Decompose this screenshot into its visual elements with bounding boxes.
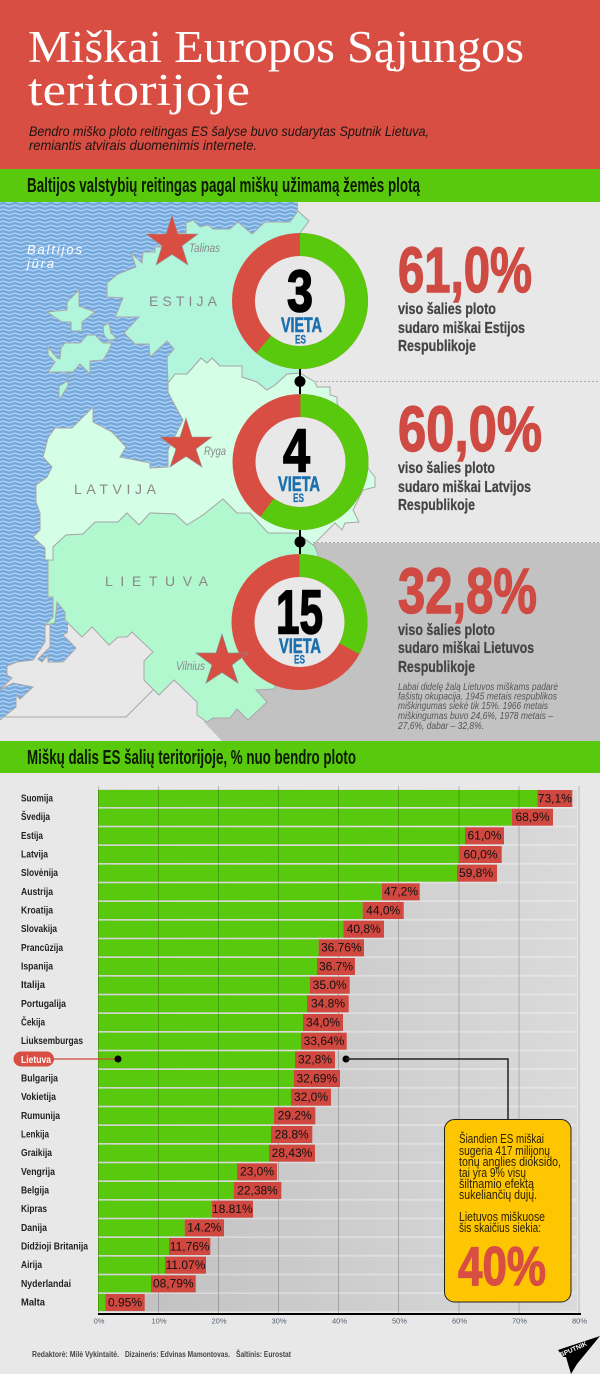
stat: Lithuania — [398, 555, 537, 676]
section heading: EU share — [0, 741, 600, 773]
sea label: Baltijos — [27, 242, 82, 257]
Estonian island: Muhu — [103, 323, 117, 340]
axis: 10% — [151, 1316, 167, 1326]
section heading: Baltic ranking: Baltijos valstybių reitingas pagal miškų užimamą žemės plotą — [27, 175, 421, 197]
country labels: Austrija — [21, 886, 53, 898]
icon: star Vilnius — [196, 634, 248, 683]
country labels: Airija — [21, 1259, 42, 1271]
chart track — [98, 789, 577, 1312]
country labels: Danija — [21, 1222, 47, 1234]
donut: Latvia rank 4: 4 — [283, 416, 310, 484]
country labels: Latvija — [21, 848, 48, 860]
connector between donuts — [294, 368, 306, 555]
value label: Belgija: 22,38% — [237, 1183, 278, 1197]
sea label: jūra — [25, 256, 54, 271]
country labels: Portugalija — [21, 998, 66, 1010]
stat: Estonia: sudaro miškai Estijos — [398, 320, 525, 337]
note on Lithuanian forests history: miškingumas siekė tik 15%. 1966 metais — [398, 700, 549, 712]
value label: Rumunija — [274, 1107, 315, 1124]
map of the Baltic states — [0, 202, 600, 741]
sea label — [25, 242, 82, 271]
value label: Malta: 0.95% — [108, 1295, 142, 1309]
axis: 30% — [271, 1316, 287, 1326]
value label: Danija: 14.2% — [187, 1221, 222, 1235]
value label: Slovakija — [343, 921, 384, 938]
neighbouring land — [0, 622, 300, 741]
value label: Ispanija: 36.7% — [319, 959, 353, 973]
subtitle: remiantis atvirais duomenimis internete. — [29, 137, 257, 153]
donut: Latvia rank 4: ES — [293, 491, 304, 505]
axis: 70% — [512, 1316, 527, 1326]
axis: 60% — [452, 1316, 467, 1326]
country labels: Vokietija — [21, 1091, 56, 1103]
axis — [94, 1314, 587, 1326]
value label: Vokietija: 32,0% — [294, 1090, 328, 1104]
country labels: Vengrija — [21, 1166, 55, 1178]
donut: Estonia rank 3: 3 — [287, 258, 313, 324]
highlight: Lietuva pill and pointer: Lietuva — [21, 1054, 51, 1066]
callout connector — [342, 1056, 508, 1120]
country labels — [21, 792, 88, 1308]
country labels: Rumunija — [21, 1110, 60, 1122]
country labels: Čekija — [21, 1016, 45, 1028]
country labels: Italija — [21, 979, 45, 991]
footer credits: Šaltinis: Eurostat — [236, 1350, 291, 1359]
value label: Italija: 35.0% — [313, 978, 347, 992]
value label: Lenkija — [271, 1126, 312, 1143]
stat: Estonia: Respublikoje — [398, 338, 476, 355]
callout: CO2 absorption: šiltnamio efektą — [459, 1177, 534, 1191]
city label: Ryga: Ryga — [204, 446, 226, 458]
value label: Rumunija: 29.2% — [278, 1109, 312, 1123]
highlight: Lietuva pill and pointer — [14, 1052, 122, 1066]
Lithuania — [45, 499, 320, 722]
country labels: Liuksemburgas — [21, 1035, 83, 1047]
callout: CO2 absorption: sugeria 417 milijonų — [459, 1144, 550, 1158]
country labels: Nyderlandai — [21, 1278, 71, 1290]
country labels: Kipras — [21, 1203, 47, 1215]
callout: CO2 absorption: tonų anglies dioksido, — [459, 1155, 561, 1169]
country labels: Slovėnija — [21, 867, 58, 879]
country labels: Estija — [21, 830, 43, 842]
donut: Lithuania rank 15: VIETA — [279, 635, 321, 658]
icon: star Tallinn — [146, 215, 198, 265]
value label: Čekija: 34,0% — [306, 1015, 340, 1029]
note on Lithuanian forests history: 27,6%, dabar – 32,8%. — [397, 720, 484, 732]
stat: Latvia: 60,0% — [398, 393, 542, 465]
axis: 50% — [392, 1316, 407, 1326]
value label: Graikija: 28,43% — [272, 1146, 313, 1160]
city label: Talinas: Talinas — [189, 243, 220, 255]
Estonian island: Saaremaa — [48, 335, 112, 400]
stat: Lithuania: 32,8% — [398, 555, 537, 627]
country labels: Suomija — [21, 792, 53, 804]
stat: Estonia: viso šalies ploto — [398, 301, 496, 318]
value label: Vengrija: 23,0% — [240, 1165, 274, 1179]
value label: Slovakija: 40,8% — [347, 922, 381, 936]
country label: Estija: ESTIJA — [149, 293, 218, 309]
callout: CO2 absorption: sukeliančių dujų. — [459, 1188, 537, 1202]
donut: Latvia rank 4 — [232, 394, 368, 530]
header panel — [0, 0, 600, 169]
callout: CO2 absorption: tai yra 9% visų — [459, 1166, 526, 1180]
donut: Lithuania rank 15: 15 — [276, 578, 323, 648]
country labels: Malta — [21, 1296, 45, 1308]
stat: Latvia — [398, 393, 542, 514]
country labels: Slovakija — [21, 923, 57, 935]
value label: Slovėnija: 59,8% — [459, 866, 493, 880]
stat: Latvia: viso šalies ploto — [398, 460, 495, 477]
subtitle: Bendro miško ploto reitingas ES šalyse buvo sudarytas Sputnik Lietuva, — [29, 123, 429, 139]
note on Lithuanian forests history: miškingumas buvo 24,6%, 1978 metais – — [398, 710, 553, 722]
bar chart: forest share by country — [14, 786, 587, 1326]
donut: Estonia rank 3: VIETA — [281, 314, 322, 337]
axis: 20% — [211, 1316, 227, 1326]
country labels: Didžioji Britanija — [21, 1240, 88, 1252]
Latvia — [33, 358, 375, 560]
donut: Estonia rank 3 — [232, 233, 368, 369]
value label: Airija: 11.07% — [166, 1258, 206, 1272]
title: Miškai Europos Sąjungos — [28, 22, 524, 72]
value label: Švedija — [512, 809, 553, 826]
value label: Estija: 61,0% — [467, 829, 502, 843]
Estonian island: Hiiumaa — [47, 290, 95, 331]
footer credits: Redaktorė: Milė Vykintaitė. — [32, 1350, 119, 1359]
Estonia — [107, 211, 309, 390]
donut: Lithuania rank 15: ES — [294, 652, 305, 666]
donut: Latvia rank 4: VIETA — [278, 473, 320, 496]
light background right — [298, 202, 600, 543]
country labels: Ispanija — [21, 960, 53, 972]
icon: star Riga — [160, 418, 212, 467]
country labels: Švedija — [21, 810, 50, 823]
value label: Lenkija: 28.8% — [275, 1127, 309, 1141]
city label: Vilnius: Vilnius — [176, 661, 205, 673]
value label: Portugalija — [307, 995, 349, 1012]
axis: 0% — [94, 1316, 105, 1326]
title — [28, 22, 524, 115]
country labels: Belgija — [21, 1184, 49, 1196]
logo: Sputnik: SPUTNIK — [559, 1341, 589, 1359]
donut: Lithuania rank 15 — [232, 554, 368, 690]
donut: Estonia rank 3: ES — [295, 332, 306, 346]
section heading: Baltic ranking — [0, 169, 600, 202]
country labels: Bulgarija — [21, 1072, 58, 1084]
logo: Sputnik — [558, 1336, 600, 1374]
value label: Lietuva: 32,8% — [298, 1053, 332, 1067]
axis: 80% — [572, 1316, 587, 1326]
dark background panel: Lithuania — [204, 543, 600, 741]
stat: Lithuania: Respublikoje — [398, 659, 475, 676]
stat: Estonia: 61,0% — [398, 234, 532, 306]
note on Lithuanian forests history: Labai didelę žalą Lietuvos miškams padarė — [398, 681, 558, 693]
value label: Liuksemburgas: 33,64% — [304, 1034, 345, 1048]
value label: Kipras: 18.81% — [212, 1202, 253, 1216]
axis: 40% — [332, 1316, 347, 1326]
callout: CO2 absorption: 40% — [458, 1235, 546, 1297]
country labels: Graikija — [21, 1147, 52, 1159]
value label: Austrija: 47,2% — [384, 885, 418, 899]
value label: Kroatija — [363, 902, 404, 919]
green bars — [98, 790, 537, 1311]
value label: Latvija: 60,0% — [463, 847, 498, 861]
value label: Latvija — [459, 846, 502, 863]
value label: Kroatija: 44,0% — [366, 903, 401, 917]
callout: CO2 absorption: Šiandien ES miškai — [459, 1131, 544, 1146]
value label: Portugalija: 34.8% — [311, 997, 345, 1011]
country labels: Kroatija — [21, 904, 53, 916]
callout: CO2 absorption: šis skaičius siekia: — [459, 1221, 541, 1235]
subtitle — [29, 123, 429, 153]
value label: Nyderlandai: 08,79% — [153, 1277, 194, 1291]
country labels: Lenkija — [21, 1128, 49, 1140]
value label: Didžioji Britanija: 11,76% — [170, 1239, 210, 1253]
stat: Estonia — [398, 234, 532, 355]
footer credits — [32, 1350, 291, 1359]
country label: Latvija: LATVIJA — [74, 481, 157, 497]
stat: Lithuania: viso šalies ploto — [398, 622, 495, 639]
value label: Švedija: 68,9% — [515, 810, 550, 824]
value label: Suomija: 73,1% — [538, 792, 572, 806]
stat: Latvia: sudaro miškai Latvijos — [398, 479, 531, 496]
section heading: EU share: Miškų dalis ES šalių teritorijoje, % nuo bendro ploto — [27, 747, 356, 769]
stat: Lithuania: sudaro miškai Lietuvos — [398, 640, 534, 657]
title: teritorijoje — [28, 65, 250, 115]
country label: Lietuva: LIETUVA — [105, 573, 209, 589]
dotted divider lines — [313, 382, 600, 542]
value label: Bulgarija: 32,69% — [296, 1071, 337, 1085]
footer credits: Dizaineris: Edvinas Mamontovas. — [125, 1350, 230, 1359]
callout: CO2 absorption: Lietuvos miškuose — [459, 1210, 545, 1224]
note on Lithuanian forests history — [397, 681, 558, 732]
stat: Latvia: Respublikoje — [398, 497, 475, 514]
note on Lithuanian forests history: fašistų okupacija. 1945 metais respublikos — [398, 690, 558, 702]
value label: Prancūzija: 36.76% — [321, 941, 362, 955]
callout: CO2 absorption — [444, 1120, 571, 1302]
sea — [0, 202, 300, 741]
country labels: Prancūzija — [21, 942, 63, 954]
